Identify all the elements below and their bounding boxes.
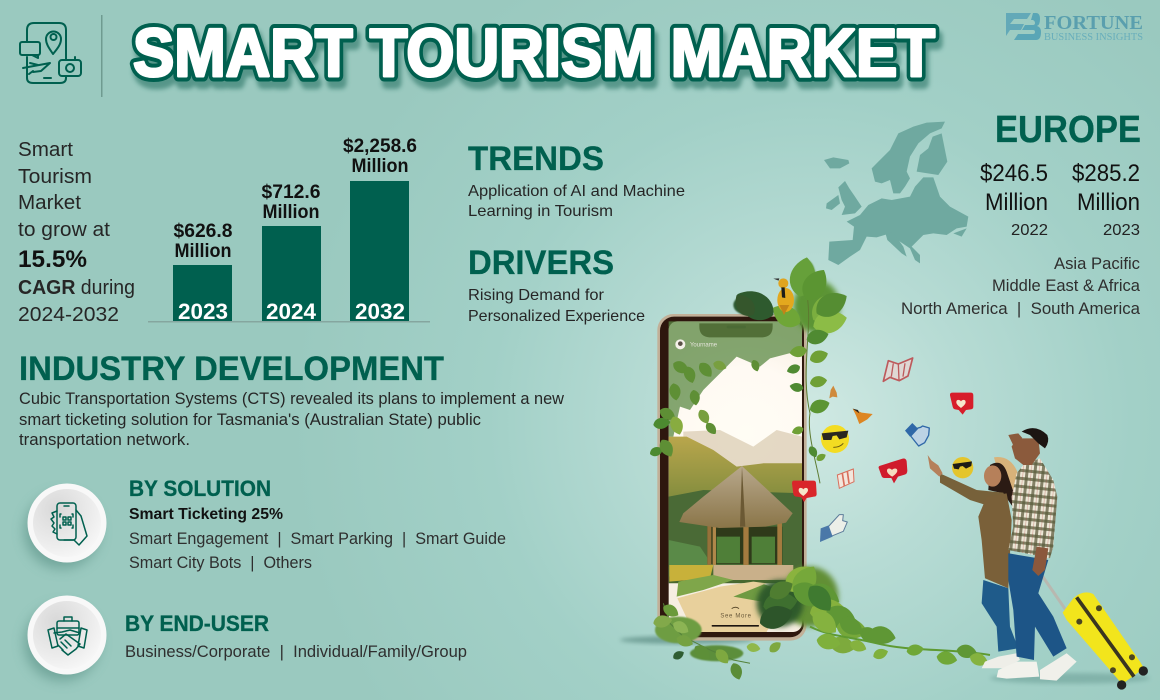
bird [773,278,794,315]
icon: thumb 1 [905,423,929,446]
icon: heart bubble 3 [792,481,817,502]
industry development: smart ticketing solution for Tasmania's (Australian State) public [19,411,481,429]
trends [468,140,685,220]
floating social icons [792,358,973,542]
bar 2023 [173,221,232,324]
icon: end-user handshake button [24,596,106,681]
bar chart: market size [148,136,430,324]
vine along the ground [788,577,990,669]
europe data [901,109,1141,318]
drivers: DRIVERS [468,244,614,282]
by solution: Smart Engagement | Smart Parking | Smart Guide [129,530,506,548]
icon: heart bubble 1 [950,393,973,415]
logo: Fortune Business Insights: FORTUNE [1044,12,1143,34]
icon: emoji 1 [821,425,849,453]
title: SMART TOURISM MARKET [133,15,935,91]
title: SMART TOURISM MARKET [133,15,935,91]
bar 2032 [343,136,417,324]
text block: CAGR statement: 15.5% [18,246,87,273]
icon: map [883,358,913,381]
bar 2032: $2,258.6 [343,136,417,157]
icon: emoji 2 [952,457,973,478]
by solution: Smart City Bots | Others [129,554,312,572]
value 2023: $285.2 [1072,160,1140,187]
icon: pamphlet [837,469,854,488]
text block: CAGR statement: Smart [18,139,73,161]
icon: butterfly 2 [853,409,873,424]
illustration: travelling couple [928,428,1150,690]
by solution: BY SOLUTION [129,476,271,501]
bar 2023: Million [174,241,232,262]
other regions [901,255,1141,318]
trends: TRENDS [468,140,604,178]
by solution [129,476,506,572]
bottom foliage on phone [652,559,883,681]
value 2023: 2023 [1103,222,1140,239]
europe data: EUROPE [995,109,1141,151]
by end-user: BY END-USER [125,611,269,636]
drivers: Personalized Experience [468,308,645,325]
by end-user [125,611,467,661]
industry development: Cubic Transportation Systems (CTS) revealed its plans to implement a new [19,390,564,408]
value 2022 [980,160,1048,239]
vines over phone [648,358,761,459]
text block: CAGR statement: Tourism [18,166,92,188]
bar 2023: 2023 [178,299,228,324]
right-hand vine and foliage [730,255,852,483]
man [997,428,1077,681]
industry development [19,350,564,449]
illustration: phone with nature scene: Yourname [690,343,718,349]
by end-user: Business/Corporate | Individual/Family/Group [125,643,467,661]
value 2022: $246.5 [980,160,1048,187]
illustration: phone with nature scene [620,255,883,681]
trends: Learning in Tourism [468,203,613,220]
drivers: Rising Demand for [468,287,605,304]
drivers [468,244,645,325]
bar 2032: 2032 [355,299,405,324]
other regions: North America | South America [901,300,1141,318]
value 2022: 2022 [1011,222,1048,239]
text block: CAGR statement [18,139,135,326]
logo: Fortune Business Insights: BUSINESS INSIGHTS [1044,32,1143,43]
by solution: Smart Ticketing 25% [129,506,283,523]
bar 2024: Million [262,202,320,223]
map: Europe [824,122,968,265]
value 2023 [1072,160,1140,239]
illustration: phone with nature scene: See More [720,614,752,620]
suitcase [1042,575,1148,690]
bar 2024: 2024 [266,299,317,324]
header divider [101,15,102,97]
bar 2024: $712.6 [262,182,320,203]
header icon: smart tourism phone [20,23,81,83]
text block: CAGR statement: 2024-2032 [18,304,119,326]
title: SMART TOURISM MARKET [136,22,938,98]
bar 2024 [262,182,321,324]
industry development: INDUSTRY DEVELOPMENT [19,350,444,388]
text block: CAGR statement: Market [18,192,81,214]
icon: heart bubble 2 [879,459,907,483]
value 2022: Million [985,189,1048,216]
other regions: Asia Pacific [1054,255,1140,273]
value 2023: Million [1077,189,1140,216]
icon: smart ticketing button [24,484,106,569]
bar 2023: $626.8 [174,221,232,242]
other regions: Middle East & Africa [992,277,1141,295]
icon: thumb 2 [820,515,847,542]
text block: CAGR statement: to grow at [18,219,110,241]
logo: Fortune Business Insights [1006,12,1143,43]
text block: CAGR statement: CAGR during [18,277,135,299]
woman [928,455,1020,668]
industry development: transportation network. [19,431,190,449]
icon: butterfly 1 [829,386,837,398]
trends: Application of AI and Machine [468,183,685,200]
bar 2032: Million [352,156,408,177]
